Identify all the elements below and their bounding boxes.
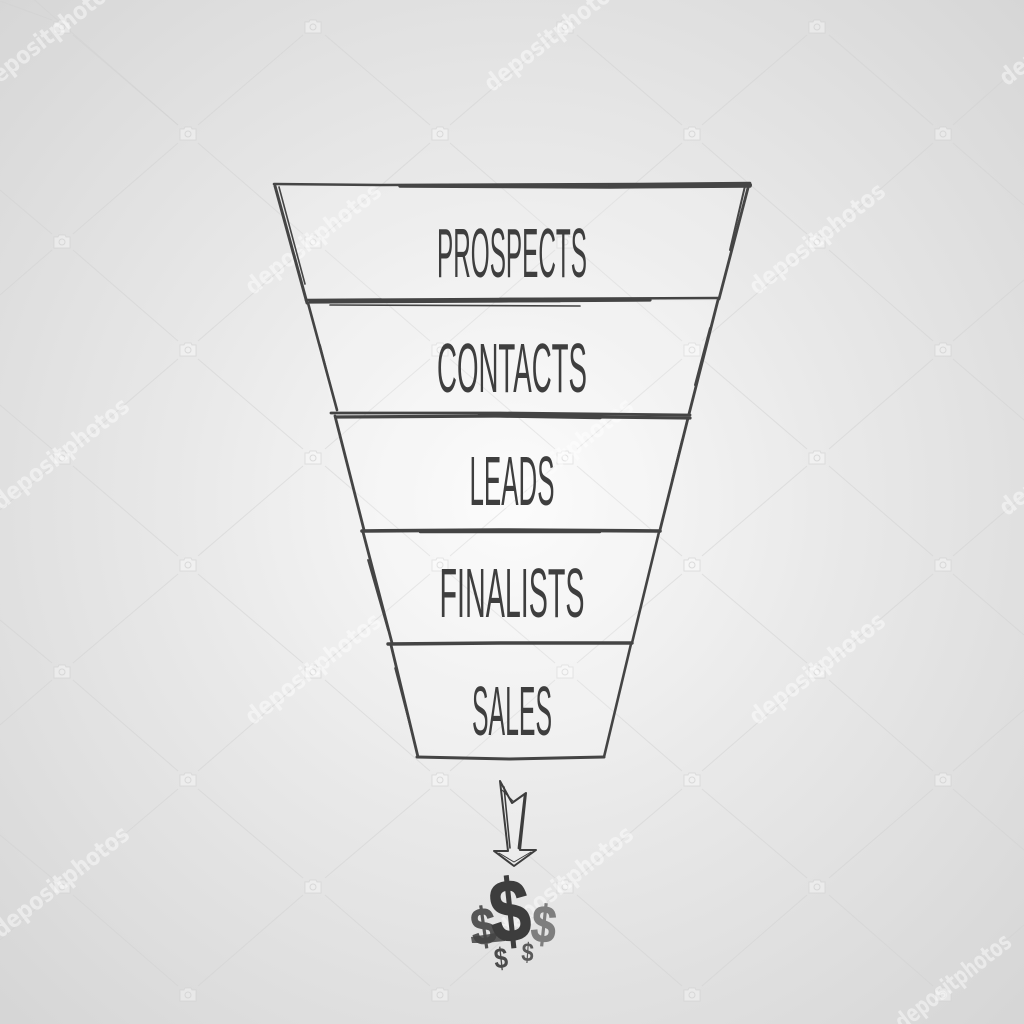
icon: dollar signs: $ xyxy=(529,895,559,955)
icon: dollar signs: $ xyxy=(485,861,535,963)
panel: prospects xyxy=(274,183,750,303)
panel: contacts xyxy=(306,298,718,414)
panel: leads xyxy=(331,413,690,530)
panel: prospects: PROSPECTS xyxy=(437,214,587,292)
icon: dollar signs: $ xyxy=(520,938,535,968)
icon: dollar signs: $ xyxy=(492,942,510,975)
icon: dollar signs: $ xyxy=(467,896,500,957)
arrow xyxy=(494,781,536,866)
icon: dollar signs xyxy=(467,861,559,975)
watermarks: depositphotos xyxy=(491,820,639,944)
watermarks: depositphotos xyxy=(491,392,639,516)
panel: sales xyxy=(388,643,632,759)
funnel xyxy=(274,183,750,759)
panel: finalists: FINALISTS xyxy=(440,554,584,632)
watermarks: depositphotos xyxy=(239,177,387,301)
panel: sales: SALES xyxy=(472,672,552,750)
panel: contacts: CONTACTS xyxy=(437,329,587,407)
watermarks: depositphotos xyxy=(743,607,891,731)
panel: finalists xyxy=(362,530,660,643)
watermarks: depositphotos xyxy=(239,607,387,731)
watermarks: depositphotos xyxy=(743,177,891,301)
panel: leads: LEADS xyxy=(470,442,554,520)
